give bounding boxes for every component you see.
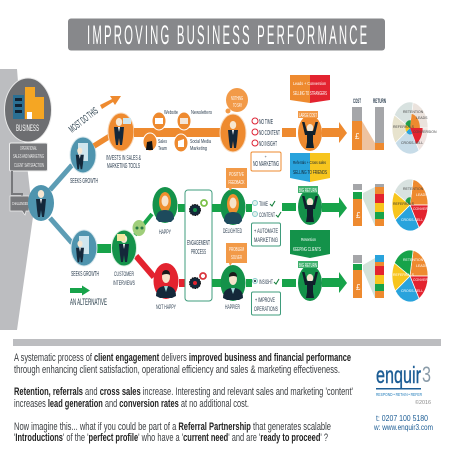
- orange bar to large cost: [282, 128, 296, 137]
- arrow: most do this: [100, 96, 121, 109]
- chart: cost return bars row 1: [352, 107, 384, 150]
- labels: tools: [158, 110, 212, 152]
- labels: tools: Website: [164, 110, 178, 116]
- box: improve operations: [252, 292, 280, 315]
- banner: selling to strangers: Leads + Conversion: [293, 81, 326, 86]
- label: happy: HAPPY: [159, 229, 171, 236]
- icon: happy face bubble: [132, 220, 146, 236]
- chart: cost labels: [353, 98, 386, 105]
- panel: operational issues: OPERATIONAL: [20, 146, 37, 152]
- chart: cost labels: COST: [353, 98, 361, 105]
- branch lines: [135, 214, 152, 235]
- chart: pie row 2: REFERRALS: [393, 202, 415, 206]
- branch line: red: [136, 256, 154, 277]
- paragraph 3: 'Introductions' of the 'perfect profile' who have a 'current need' and are 'ready to proceed' ?: [14, 432, 328, 444]
- box: automate marketing: + AUTOMATE: [254, 228, 278, 235]
- icon: big return bottom: BIG RETURN: [299, 263, 317, 269]
- chart: pie row 3: CONVERSION: [413, 278, 437, 282]
- logo: enquir3: [376, 362, 431, 406]
- icon: big return top: BIG RETURN: [299, 188, 317, 194]
- arrow: green bottom: [322, 272, 347, 293]
- chart: pie row 3: RETENTION: [403, 258, 424, 262]
- list: no time, content, insight: [252, 117, 280, 148]
- text: NO CONTENT: [259, 128, 280, 137]
- connector and challenges bubble: [10, 171, 29, 215]
- chart: pie row 2: RETENTION: [403, 187, 424, 191]
- chart: cost return bars row 3: [353, 255, 384, 298]
- banner: selling to friends: [290, 153, 330, 182]
- icon: happier: [220, 265, 246, 301]
- label: invests: INVESTS IN SALES &: [106, 155, 141, 162]
- text block: description: [14, 352, 353, 444]
- orange main bar: [134, 128, 222, 137]
- logo: enquir3: ©2016: [415, 399, 431, 406]
- chart: cost return bars row 1: £: [355, 132, 360, 141]
- chart: pie row 2: CROSS-SELL: [401, 218, 423, 222]
- icon: large cost person: [298, 111, 322, 151]
- label: business: BUSINESS: [16, 123, 39, 133]
- box: improve operations: + IMPROVE: [255, 297, 275, 304]
- title: IMPROVING BUSINESS PERFORMANCE: [87, 21, 367, 51]
- callout: problem solver: SOLVER: [231, 255, 242, 261]
- chart: pie row 3: LEADS: [416, 264, 428, 268]
- list: no time, content, insight: NO TIME: [259, 117, 273, 126]
- connector and challenges bubble: CHALLENGES: [12, 201, 28, 207]
- thought bubble: nothing to say: NOTHING: [231, 96, 243, 102]
- icon: invests in tools: [108, 113, 134, 151]
- panel: business: [4, 78, 52, 142]
- banner: selling to friends: Referrals + Cross sales: [293, 160, 327, 165]
- list: insight: [252, 278, 279, 286]
- logo: enquir3: enquir: [376, 362, 421, 388]
- paragraph 2: [14, 386, 353, 410]
- icon: big return top: [298, 186, 322, 225]
- panel: operational issues: CLIENT SATISFACTION: [14, 163, 44, 169]
- icon: sales team: [143, 133, 157, 151]
- icon: large cost person: LARGE COST: [299, 113, 317, 119]
- panel: operational issues: SALES AND MARKETING: [13, 154, 44, 160]
- callout: problem solver: PROBLEM: [229, 247, 244, 253]
- icon: social media: [174, 134, 188, 152]
- icon: nothing to say person: [220, 114, 246, 152]
- labels: tools: Newsletters: [191, 110, 212, 116]
- banner: selling to strangers: SELLING TO STRANGERS: [293, 91, 327, 97]
- logo: enquir3: RESPOND • RETAIN • REFER: [376, 392, 422, 397]
- chart: pie row 1: [392, 102, 437, 154]
- chart: pie row 3: CROSS-SELL: [401, 289, 423, 293]
- icon: big return bottom: [298, 261, 322, 301]
- icon: buildings: [13, 87, 44, 119]
- banner: selling to friends: SELLING TO FRIENDS: [293, 170, 327, 176]
- chart: cost return bars row 2: [353, 184, 384, 226]
- label: most do this: MOST DO THIS: [67, 106, 101, 135]
- paragraph 3: Now imagine this... what if you could be part of a Referral Partnership that generates scalable: [14, 421, 331, 433]
- icon: newsletters: [177, 112, 191, 130]
- labels: tools: Team: [158, 146, 167, 152]
- label: customer interviews: INTERVIEWS: [113, 280, 135, 287]
- chart: pie row 1: LEADS: [416, 116, 428, 120]
- chart: pie row 1: CROSS-SELL: [401, 141, 423, 145]
- box: automate marketing: MARKETING: [254, 237, 278, 244]
- labels: tools: Marketing: [190, 146, 207, 152]
- chart: pie row 1: CONVERSION: [413, 130, 437, 134]
- logo: enquir3: 3: [422, 362, 431, 387]
- list: time, content: [252, 200, 281, 219]
- list: insight: INSIGHT: [259, 279, 273, 286]
- callout: problem solver: [226, 243, 247, 266]
- arrow: alternative: [70, 286, 90, 296]
- box: no marketing: +: [264, 154, 268, 159]
- callout: positive feedback: POSITIVE: [229, 172, 244, 178]
- chart: pie row 2: [392, 179, 437, 231]
- callout: positive feedback: [226, 168, 247, 191]
- banner: keeping clients: [290, 230, 330, 258]
- icon: website: [152, 112, 166, 130]
- panel: operational issues: [10, 143, 48, 171]
- connectors to next stage: [212, 203, 296, 287]
- divider band: [13, 339, 441, 346]
- label: customer interviews: [113, 271, 135, 287]
- thought bubble: nothing to say: TO SAY: [233, 103, 242, 109]
- list: time, content: CONTENT: [259, 212, 275, 219]
- box: no marketing: [251, 152, 281, 171]
- icon: seeks growth bottom: [71, 230, 97, 266]
- text: SEEKS GROWTH: [71, 271, 99, 278]
- chart: pie row 1: REFERRALS: [393, 125, 415, 129]
- text: NO MARKETING: [253, 159, 279, 168]
- box: improve operations: OPERATIONS: [254, 306, 278, 313]
- paragraph 1: [14, 352, 351, 376]
- text: AN ALTERNATIVE: [70, 297, 107, 308]
- banner: selling to strangers: [290, 75, 330, 103]
- label: invests: [106, 155, 141, 170]
- connector: red: [179, 279, 185, 287]
- paragraph 1: A systematic process of client engagement delivers improved business and financial performance: [14, 352, 351, 364]
- teal paths: [50, 165, 72, 243]
- box: automate marketing: [252, 223, 280, 246]
- icon: not happy: [154, 263, 178, 299]
- icon: seeks growth top: [70, 137, 96, 173]
- chart: pie row 3: REFERRALS: [393, 273, 415, 277]
- labels: tools: Social Media: [190, 139, 212, 145]
- paragraph 2: increases lead generation and conversion rates at no additional cost.: [14, 398, 249, 410]
- panel: engagement process: ENGAGEMENT: [187, 240, 210, 247]
- label: not happy: NOT HAPPY: [156, 304, 176, 311]
- panel: engagement process: PROCESS: [191, 249, 206, 256]
- text: SEEKS GROWTH: [70, 178, 98, 185]
- connectors to engagement: [178, 204, 185, 212]
- chart: pie row 1: RETENTION: [403, 110, 424, 114]
- paragraph 3: [14, 421, 331, 444]
- callout: positive feedback: FEEDBACK: [228, 180, 245, 186]
- label: happier: HAPPIER: [225, 304, 240, 311]
- arrow: green top: [322, 197, 347, 218]
- contact details: [373, 414, 433, 432]
- arrow: orange: [322, 122, 347, 143]
- paragraph 2: Retention, referrals and cross sales increase. Interesting and relevant sales and marketing 'content': [14, 386, 353, 398]
- label: delighted: DELIGHTED: [223, 228, 242, 235]
- list: time, content: TIME: [259, 201, 268, 208]
- chart: pie row 2: LEADS: [416, 193, 428, 197]
- icon: challenge person: [28, 185, 54, 221]
- text: RETURN: [373, 98, 386, 105]
- labels: tools: Sales: [158, 139, 167, 145]
- green segment to customer interviews: [96, 244, 111, 253]
- icon: delighted: [220, 189, 246, 225]
- chart: pie row 2: CONVERSION: [413, 207, 437, 211]
- chart: pie row 3: [392, 250, 437, 302]
- banner: keeping clients: Retention: [301, 237, 316, 242]
- chart: cost return bars row 2: £: [356, 211, 361, 220]
- chart: cost return bars row 3: £: [356, 283, 361, 292]
- thought bubble: nothing to say: [226, 88, 248, 114]
- panel: engagement process: [185, 190, 212, 301]
- banner: keeping clients: KEEPING CLIENTS: [293, 247, 321, 253]
- label: customer interviews: CUSTOMER: [114, 271, 134, 278]
- text: NO INSIGHT: [259, 139, 277, 148]
- icon: happy: [152, 187, 178, 223]
- gray left backdrop: [0, 69, 33, 330]
- label: invests: MARKETING TOOLS: [107, 163, 140, 170]
- contact details: t: 0207 100 5180: [376, 414, 428, 423]
- contact details: w: www.enquir3.com: [373, 423, 433, 432]
- orange path segment: [94, 136, 110, 146]
- icon: customer interviews: [112, 230, 136, 266]
